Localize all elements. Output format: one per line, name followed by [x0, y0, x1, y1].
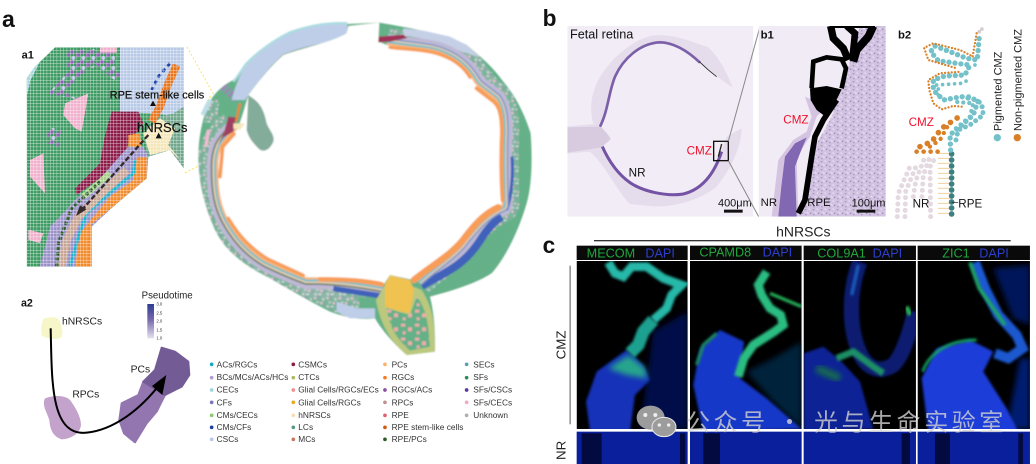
a1 label: a1	[22, 50, 34, 62]
blob: RPCs	[44, 396, 81, 439]
trajectory arrow	[51, 328, 166, 433]
fetal retina labels: NR	[629, 167, 646, 180]
cell type legend: PCs	[392, 359, 407, 369]
cell type legend: ACs/RGCs	[217, 359, 257, 369]
b2 labels: NR	[913, 197, 929, 210]
retina layers	[218, 45, 512, 296]
panel label: a: a	[2, 6, 15, 32]
cell type legend	[210, 359, 512, 444]
dashed trajectory arrow	[76, 135, 148, 216]
cell type legend: SFs/CSCs	[473, 385, 512, 395]
header bars: DAPI	[873, 247, 902, 261]
panel: a1 spatial zoom map	[22, 47, 205, 270]
blob: hNRSCs	[41, 317, 62, 339]
central hole	[218, 23, 502, 285]
panel b2 schematic	[897, 28, 983, 217]
image: ZIC1	[918, 261, 1030, 432]
b2 legend: Pigmented CMZ	[993, 51, 1005, 131]
pseudotime legend	[142, 291, 193, 341]
header bars: DAPI	[645, 247, 675, 261]
fetal retina labels: CMZ	[687, 145, 712, 158]
blob: PCs	[119, 348, 189, 442]
panel c: immunofluorescence grid	[543, 223, 1030, 464]
row bar and labels: NR	[553, 441, 568, 460]
labels: PCs	[131, 364, 150, 375]
pseudotime legend: 3.0	[156, 302, 163, 307]
outer stromal band	[198, 23, 532, 355]
watermark: 公众号 · 光与生命实验室	[686, 403, 1003, 438]
cell type legend: RPCs	[392, 397, 413, 407]
header bars: DAPI	[763, 245, 792, 259]
cell type legend: MCs	[298, 434, 315, 444]
cell type legend: Glial Cells/RGCs/ECs	[298, 385, 379, 395]
c label: c	[543, 232, 555, 258]
b1 labels: CMZ	[783, 113, 809, 126]
b2 legend: Non-pigmented CMZ	[1013, 29, 1025, 131]
header bars: ZIC1	[942, 247, 970, 261]
cell type legend: CMs/CECs	[217, 410, 258, 420]
cell type legend: CMs/CFs	[217, 422, 251, 432]
b2 labels	[909, 116, 982, 210]
b label: b	[543, 5, 557, 31]
cell type legend: RPE	[392, 410, 409, 420]
b1 labels: RPE	[807, 197, 831, 209]
labels: RPCs	[72, 390, 99, 401]
cell type legend: CFs	[217, 397, 232, 407]
fetal retina section	[567, 26, 753, 217]
group heading hNRSCs: hNRSCs	[776, 223, 831, 239]
b2 legend	[993, 29, 1025, 141]
labels	[62, 317, 150, 401]
cell type legend: SFs/CECs	[473, 397, 512, 407]
images: NR row	[577, 432, 1030, 464]
header bars: DAPI	[979, 247, 1009, 261]
cell type legend: RPE stem-like cells	[392, 422, 463, 432]
top grey cells	[979, 28, 983, 32]
non-pigmented CMZ cells	[917, 33, 977, 152]
b1 labels: NR	[761, 197, 777, 209]
pseudotime legend: 2.5	[156, 310, 163, 315]
label: hNRSCs: hNRSCs	[137, 120, 188, 135]
header bars: COL9A1	[817, 247, 866, 261]
header bars: CPAMD8	[699, 245, 751, 259]
image: COL9A1	[804, 261, 916, 432]
label: RPE stem-like cells: RPE stem-like cells	[110, 89, 205, 101]
pseudotime legend: Pseudotime	[142, 291, 193, 302]
panel b1	[759, 26, 886, 217]
inner orange RGC edge	[220, 47, 503, 284]
cell type legend: CTCs	[298, 372, 320, 382]
pseudotime legend: 1.0	[156, 336, 163, 341]
labels: hNRSCs	[62, 317, 102, 328]
cell type legend: RGCs/ACs	[392, 385, 432, 395]
row bar and labels	[553, 266, 571, 460]
b2 labels: RPE	[958, 197, 982, 210]
b1 labels	[761, 30, 885, 213]
optic stalk	[376, 275, 435, 355]
photoreceptor lines	[938, 153, 950, 213]
crimson regions	[218, 117, 236, 144]
image: MECOM	[577, 261, 688, 432]
CSCs upper left band	[232, 24, 347, 100]
fetal retina labels: 400μm	[718, 198, 752, 210]
cell type legend: hNRSCs	[298, 410, 331, 420]
cell type legend: CECs	[217, 385, 238, 395]
header bars: MECOM	[587, 247, 635, 261]
cell type legend: SECs	[473, 359, 495, 369]
b1 labels: b1	[761, 30, 774, 42]
fetal retina labels: Fetal retina	[570, 27, 634, 41]
NR cells	[897, 157, 936, 217]
cell type legend: LCs	[298, 422, 313, 432]
pigmented CMZ cells	[931, 37, 983, 150]
cell type legend: Glial Cells/RGCs	[298, 397, 361, 407]
fetal retina labels	[570, 27, 752, 213]
b1 labels: 100μm	[852, 198, 885, 210]
scattered mixed cells	[206, 33, 502, 285]
a2 label: a2	[21, 298, 33, 310]
a1 spot map	[27, 47, 187, 270]
inset box	[714, 141, 728, 161]
pseudotime legend: 1.5	[156, 327, 163, 332]
row bar and labels: CMZ	[553, 330, 568, 359]
image: CPAMD8	[690, 261, 802, 432]
cell type legend: CSCs	[217, 434, 238, 444]
lower left dense patch	[290, 283, 375, 318]
cell type legend: Unknown	[473, 410, 508, 420]
cell type legend: RGCs	[392, 372, 414, 382]
panel b: histology and schematic	[543, 5, 1025, 217]
cell type legend: SFs	[473, 372, 488, 382]
cell type legend: CSMCs	[298, 359, 327, 369]
top right CSC edge	[403, 28, 480, 57]
b2 label: b2	[898, 30, 911, 42]
cell type legend: RPE/PCs	[392, 434, 427, 444]
panel: a2 pseudotime trajectory	[21, 291, 512, 444]
zoom guide: yellow dotted box and lines	[185, 47, 247, 173]
LCs flap	[247, 95, 274, 151]
chart: circular spatial transcriptomics map	[190, 17, 537, 360]
pseudotime legend: 2.0	[156, 319, 163, 324]
header bars	[577, 245, 1030, 261]
zoom lines	[728, 27, 760, 217]
b2 labels: CMZ	[909, 116, 934, 129]
RPE cells	[943, 154, 960, 215]
cell type legend: BCs/MCs/ACs/HCs	[217, 372, 288, 382]
